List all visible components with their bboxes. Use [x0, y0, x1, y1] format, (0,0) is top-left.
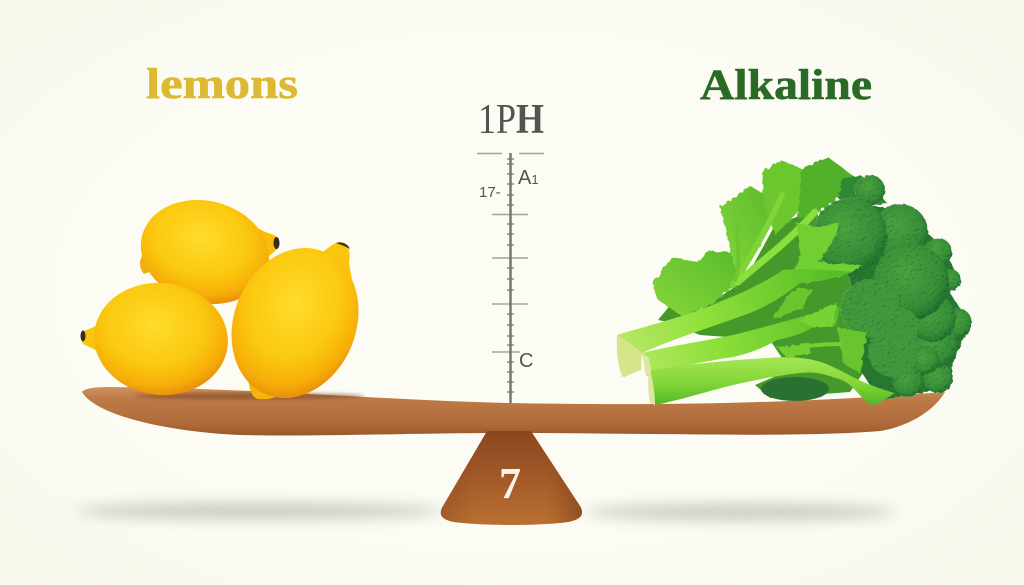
balance beam [82, 387, 945, 436]
lemons [80, 186, 380, 417]
lemon: right [210, 229, 380, 417]
broccoli: bright leaves over florets [773, 223, 862, 320]
ground shadow: left [75, 503, 445, 519]
broccoli: lower stalk [650, 357, 895, 405]
broccoli: florets [813, 175, 972, 400]
broccoli: thin leaf stalk [785, 344, 842, 350]
heading: pH: 1PH [478, 97, 544, 143]
lemon: lower left [80, 276, 233, 402]
broccoli: lower stalk cut end [648, 370, 655, 405]
broccoli: dark foliage behind stalks [658, 210, 865, 398]
heading: lemons: lemons [146, 61, 298, 108]
broccoli: thin stalks to leaves [733, 195, 815, 285]
broccoli: main stalk [617, 269, 853, 377]
broccoli [617, 157, 972, 405]
broccoli: small leaves on stalks [777, 303, 867, 373]
broccoli: middle stalk [642, 307, 840, 376]
pH ruler [477, 153, 544, 403]
lemon: contact shadow [135, 392, 365, 400]
broccoli: middle stalk cut end [642, 353, 652, 376]
ruler label: 17: 17- [479, 184, 501, 201]
lemon: top [129, 186, 281, 318]
broccoli: leaves [652, 157, 888, 316]
heading: Alkaline: Alkaline [700, 62, 872, 109]
ruler label: A1: A1 [518, 167, 539, 189]
ruler label: C: C [519, 350, 533, 372]
fulcrum cone with number 7 [441, 431, 582, 525]
ground shadow: right [585, 504, 895, 520]
broccoli: under floret [761, 377, 829, 401]
fulcrum cone with number 7: 7 [499, 459, 521, 508]
broccoli: main stalk cut end [617, 335, 642, 377]
